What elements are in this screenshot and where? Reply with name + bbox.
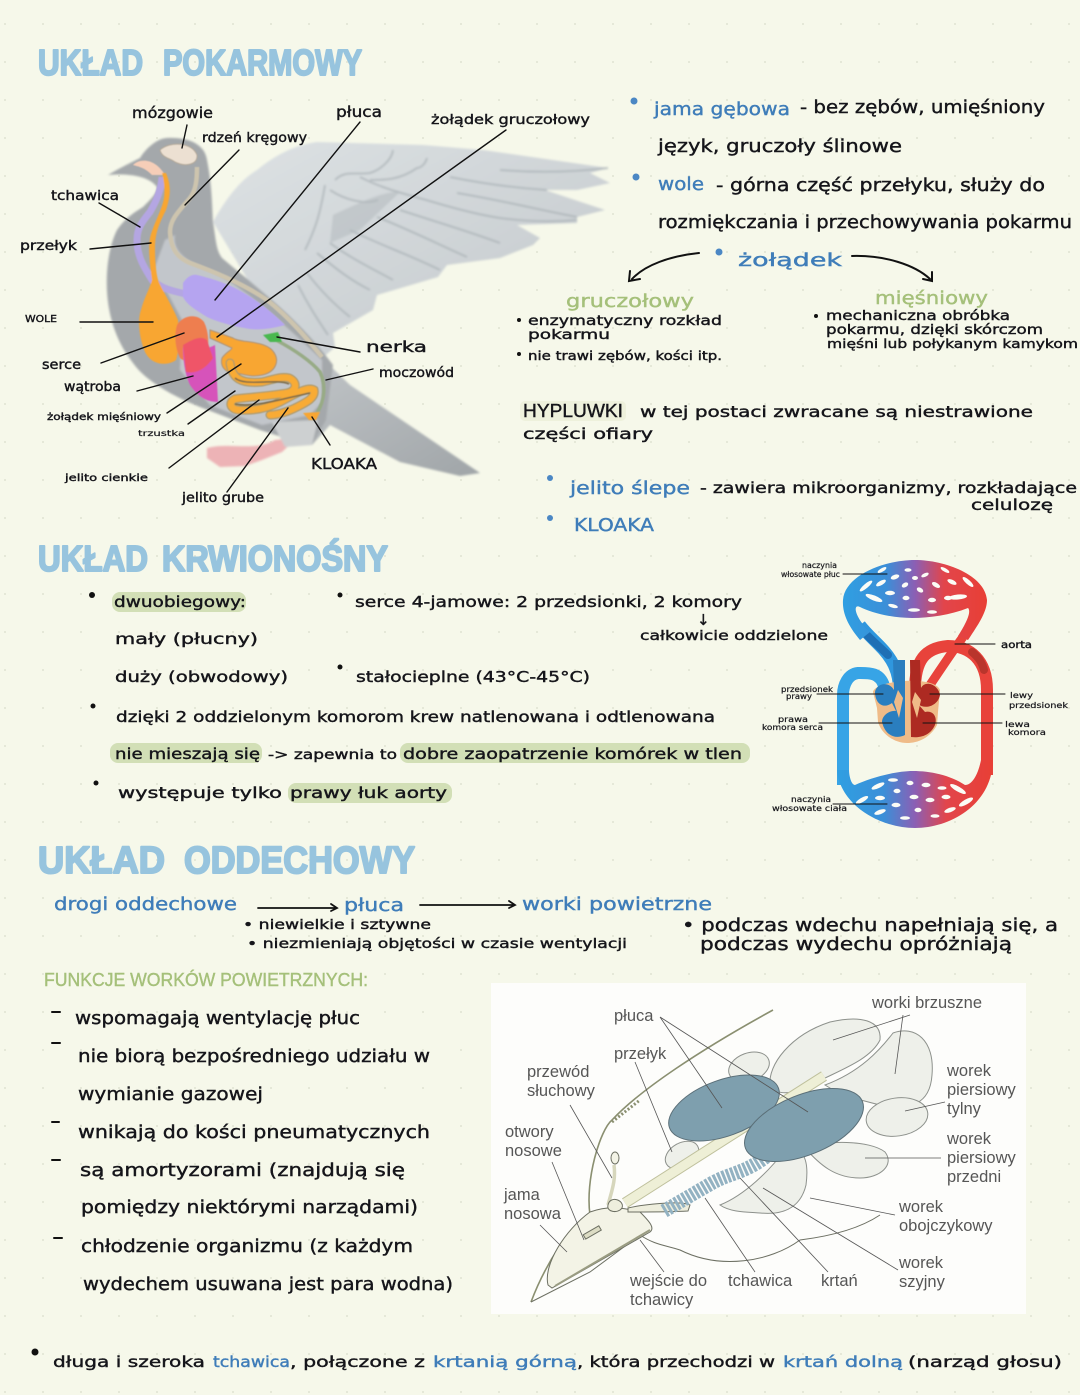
text block: trachea note: krtanią górną xyxy=(433,1353,577,1371)
text block: mouth, crop, stomach notes: - górna część przełyku, służy do xyxy=(716,175,1045,196)
flow: airways to air sacs: worki powietrzne xyxy=(522,894,712,915)
labels: respiratory figure: worki brzuszne xyxy=(871,994,982,1012)
list: air sac functions: wspomagają wentylację płuc xyxy=(75,1008,360,1029)
arrow: to air sacs xyxy=(420,901,515,908)
labels: circulation: włosowate ciała xyxy=(772,804,847,813)
flow: airways to air sacs xyxy=(54,894,1058,955)
title: układ oddechowy: UKŁAD xyxy=(38,840,165,882)
diagram: double circulation xyxy=(762,560,1068,828)
title: układ pokarmowy xyxy=(38,42,362,83)
labels: respiratory figure: piersiowy xyxy=(947,1081,1017,1099)
labels: circulation xyxy=(762,561,1068,813)
text block: jelito ślepe, kloaka: jelito ślepe xyxy=(569,478,690,499)
labels: respiratory figure: przełyk xyxy=(614,1045,667,1063)
title: układ krwionośny: UKŁAD xyxy=(38,538,148,579)
labels: respiratory figure: krtań xyxy=(821,1272,858,1290)
labels: bird organs: WOLE xyxy=(25,314,57,325)
organ: kidney and ureter xyxy=(276,340,324,413)
labels: circulation: naczynia xyxy=(802,561,837,570)
text block: mouth, crop, stomach notes: język, gruczoły ślinowe xyxy=(657,136,902,157)
list: air sac functions: wymianie gazowej xyxy=(78,1084,263,1105)
organ: heart xyxy=(175,316,208,361)
panel: bird respiratory system figure xyxy=(491,983,1026,1314)
labels: respiratory figure: worek xyxy=(898,1198,944,1216)
labels: bird organs: KLOAKA xyxy=(311,455,378,473)
list: air sac functions: są amortyzorami (znajdują się xyxy=(80,1160,405,1181)
text block: circulatory notes: prawy łuk aorty xyxy=(290,784,447,802)
text block: wypluwki: w tej postaci zwracane są niestrawione xyxy=(640,403,1033,421)
labels: circulation: przedsionek xyxy=(781,685,833,694)
labels: respiratory figure: nosowa xyxy=(504,1205,562,1223)
organ: brain xyxy=(160,144,197,165)
labels: respiratory figure: piersiowy xyxy=(947,1149,1017,1167)
labels: bird organs: przełyk xyxy=(20,239,78,254)
text block: mouth, crop, stomach notes: rozmiękczania i przechowywania pokarmu xyxy=(658,212,1072,233)
labels: bird organs: nerka xyxy=(366,338,427,356)
labels: respiratory figure: worek xyxy=(946,1130,992,1148)
text block: mouth, crop, stomach notes xyxy=(517,97,1078,363)
labels: respiratory figure: worek xyxy=(946,1062,992,1080)
text block: mouth, crop, stomach notes: gruczołowy xyxy=(566,291,694,312)
organ: spinal cord xyxy=(170,167,322,357)
text block: mouth, crop, stomach notes: mechaniczna obróbka xyxy=(826,309,1010,324)
text block: jelito ślepe, kloaka: celulozę xyxy=(971,496,1053,514)
vessels: blue loop xyxy=(843,673,884,785)
text block: mouth, crop, stomach notes: mięśniowy xyxy=(875,288,988,309)
organ: beak cavity xyxy=(133,161,165,175)
text block: wypluwki xyxy=(520,401,1033,443)
labels: bird organs: jelito grube xyxy=(181,491,264,506)
organ: cloaca xyxy=(303,412,320,420)
list: air sac functions xyxy=(52,1008,453,1295)
labels: bird organs xyxy=(20,103,590,506)
text block: circulatory notes: -> zapewnia to xyxy=(268,748,397,763)
arrow: to lungs xyxy=(258,904,337,911)
list: air sac functions: pomiędzy niektórymi narządami) xyxy=(81,1197,418,1218)
organ: liver xyxy=(183,345,218,402)
text block: circulatory notes: dobre zaopatrzenie komórek w tlen xyxy=(403,745,742,763)
title: układ oddechowy xyxy=(38,840,415,882)
labels: respiratory figure: obojczykowy xyxy=(899,1217,993,1235)
text block: wypluwki: HYPLUWKI xyxy=(523,401,623,421)
arrows: stomach branches xyxy=(629,253,932,281)
text block: jelito ślepe, kloaka: KLOAKA xyxy=(574,515,655,536)
labels: respiratory figure: nosowe xyxy=(505,1142,562,1160)
text block: mouth, crop, stomach notes: wole xyxy=(658,174,704,195)
labels: respiratory figure: jama xyxy=(503,1186,541,1204)
text block: circulatory notes: nie mieszają się xyxy=(115,745,260,763)
heart xyxy=(873,660,940,743)
flow: airways to air sacs: drogi oddechowe xyxy=(54,894,237,915)
text block: mouth, crop, stomach notes: mięśni lub połykanym kamykom xyxy=(827,337,1078,351)
leader lines xyxy=(80,122,506,492)
text block: mouth, crop, stomach notes: pokarmu, dzięki skórczom xyxy=(826,323,1043,338)
text block: circulatory notes: mały (płucny) xyxy=(115,630,258,648)
text block: circulatory notes xyxy=(89,592,828,803)
text block: mouth, crop, stomach notes: - bez zębów, umięśniony xyxy=(800,97,1045,118)
lungs xyxy=(660,1062,788,1154)
organ: intestines xyxy=(230,363,314,415)
list: air sac functions: wydechem usuwana jest para wodna) xyxy=(83,1274,453,1295)
labels: circulation: prawy xyxy=(786,692,812,701)
labels: respiratory figure: otwory xyxy=(505,1123,554,1141)
labels: bird organs: żołądek mięśniowy xyxy=(47,411,161,423)
text block: mouth, crop, stomach notes: pokarmu xyxy=(528,328,610,343)
leader lines: respiratory figure xyxy=(540,1015,945,1272)
labels: bird organs: tchawica xyxy=(51,189,119,204)
organ: oesophagus and crop xyxy=(139,173,179,364)
labels: circulation: lewa xyxy=(1005,720,1030,729)
flow: airways to air sacs: płuca xyxy=(344,895,404,916)
labels: bird organs: rdzeń kręgowy xyxy=(202,131,307,146)
flow: airways to air sacs: • podczas wdechu napełniają się, a xyxy=(682,915,1058,936)
text block: jelito ślepe, kloaka: - zawiera mikroorganizmy, rozkładające xyxy=(700,479,1077,497)
bird head and neck outline xyxy=(531,1010,880,1302)
title: układ pokarmowy: POKARMOWY xyxy=(163,42,362,83)
text block: jelito ślepe, kloaka xyxy=(547,475,1077,536)
labels: circulation: komora xyxy=(1008,728,1046,737)
labels: respiratory figure: tylny xyxy=(947,1100,982,1118)
heading: funkcje worków powietrznych: FUNKCJE WORKÓW POWIETRZNYCH: xyxy=(44,969,368,990)
labels: circulation: przedsionek xyxy=(1009,701,1068,710)
text block: trachea note: (narząd głosu) xyxy=(908,1353,1062,1371)
text block: trachea note: długa i szeroka xyxy=(53,1353,205,1371)
bird illustration xyxy=(107,138,610,476)
list: air sac functions: wnikają do kości pneumatycznych xyxy=(78,1122,430,1143)
labels: bird organs: jelito cienkie xyxy=(64,473,148,484)
text block: circulatory notes: stałocieplne (43°C-45°C) xyxy=(356,668,590,686)
flow: airways to air sacs: podczas wydechu opróżniają xyxy=(700,934,1012,955)
flow: airways to air sacs: • niewielkie i sztywne xyxy=(243,918,431,933)
labels: respiratory figure: tchawica xyxy=(728,1272,793,1290)
text block: mouth, crop, stomach notes: enzymatyczny rozkład xyxy=(528,314,722,329)
labels: bird organs: moczowód xyxy=(379,366,454,381)
organ: stomach xyxy=(210,330,277,376)
vessels: aorta xyxy=(915,646,987,775)
capillaries: body xyxy=(837,760,993,828)
labels: respiratory figure: przedni xyxy=(947,1168,1001,1186)
text block: mouth, crop, stomach notes: jama gębowa xyxy=(653,99,790,120)
text block: trachea note: , która przechodzi w xyxy=(577,1353,775,1371)
text block: trachea note: tchawica xyxy=(213,1353,290,1371)
oesophagus xyxy=(625,1076,824,1203)
text block: circulatory notes: dwuobiegowy: xyxy=(114,593,246,611)
text block: circulatory notes: duży (obwodowy) xyxy=(115,668,288,686)
labels: respiratory figure: słuchowy xyxy=(527,1082,596,1100)
trachea xyxy=(664,1155,768,1211)
text block: circulatory notes: ↓ xyxy=(697,611,710,629)
flow: airways to air sacs: • niezmieniają objętości w czasie wentylacji xyxy=(247,937,627,952)
text block: circulatory notes: całkowicie oddzielone xyxy=(640,629,828,644)
capillaries: lungs xyxy=(843,560,987,640)
list: air sac functions: nie biorą bezpośredniego udziału w xyxy=(78,1046,430,1067)
labels: circulation: aorta xyxy=(1001,640,1032,651)
labels: bird organs: wątroba xyxy=(64,380,121,395)
labels: respiratory figure: tchawicy xyxy=(630,1291,694,1309)
text block: circulatory notes: występuje tylko xyxy=(118,784,282,802)
labels: bird organs: żołądek gruczołowy xyxy=(431,113,590,128)
text block: trachea note: krtań dolną xyxy=(783,1353,903,1371)
labels: respiratory figure: płuca xyxy=(614,1007,654,1025)
labels: respiratory figure: wejście do xyxy=(629,1272,707,1290)
text block: circulatory notes: dzięki 2 oddzielonym komorom krew natlenowana i odtlenowana xyxy=(116,708,715,726)
labels: bird organs: mózgowie xyxy=(132,104,213,122)
title: układ krwionośny: KRWIONOŚNY xyxy=(162,537,388,579)
labels: circulation: prawa xyxy=(778,715,808,724)
labels: respiratory figure: szyjny xyxy=(899,1273,946,1291)
labels: respiratory figure xyxy=(503,994,1017,1309)
text block: trachea note xyxy=(32,1348,1062,1371)
vessels: pulmonary vein xyxy=(928,637,963,688)
labels: bird organs: płuca xyxy=(336,103,382,121)
organ: lungs xyxy=(183,275,285,329)
vessels: pulmonary artery xyxy=(860,625,899,690)
text block: wypluwki: części ofiary xyxy=(523,425,653,443)
diagram: pigeon digestive system xyxy=(20,103,610,506)
labels: bird organs: serce xyxy=(42,358,81,373)
labels: circulation: naczynia xyxy=(791,795,831,804)
labels: respiratory figure: worek xyxy=(898,1254,944,1272)
labels: circulation: komora serca xyxy=(762,723,823,732)
text block: trachea note: , połączone z xyxy=(290,1353,425,1371)
text block: circulatory notes: serce 4-jamowe: 2 przedsionki, 2 komory xyxy=(355,593,742,611)
title: układ krwionośny xyxy=(38,537,388,579)
labels: circulation: lewy xyxy=(1010,691,1033,700)
organ: trachea xyxy=(137,177,186,294)
labels: bird organs: trzustka xyxy=(138,429,185,438)
text block: mouth, crop, stomach notes: żołądek xyxy=(738,250,843,271)
title: układ pokarmowy: UKŁAD xyxy=(38,42,143,83)
list: air sac functions: chłodzenie organizmu (z każdym xyxy=(81,1236,413,1257)
air sacs xyxy=(724,1047,774,1087)
text block: mouth, crop, stomach notes: nie trawi zębów, kości itp. xyxy=(528,349,722,363)
labels: respiratory figure: przewód xyxy=(527,1063,589,1081)
labels: circulation: włosowate płuc xyxy=(781,570,840,579)
title: układ oddechowy: ODDECHOWY xyxy=(184,840,415,882)
leader lines: circulation xyxy=(817,574,1005,804)
